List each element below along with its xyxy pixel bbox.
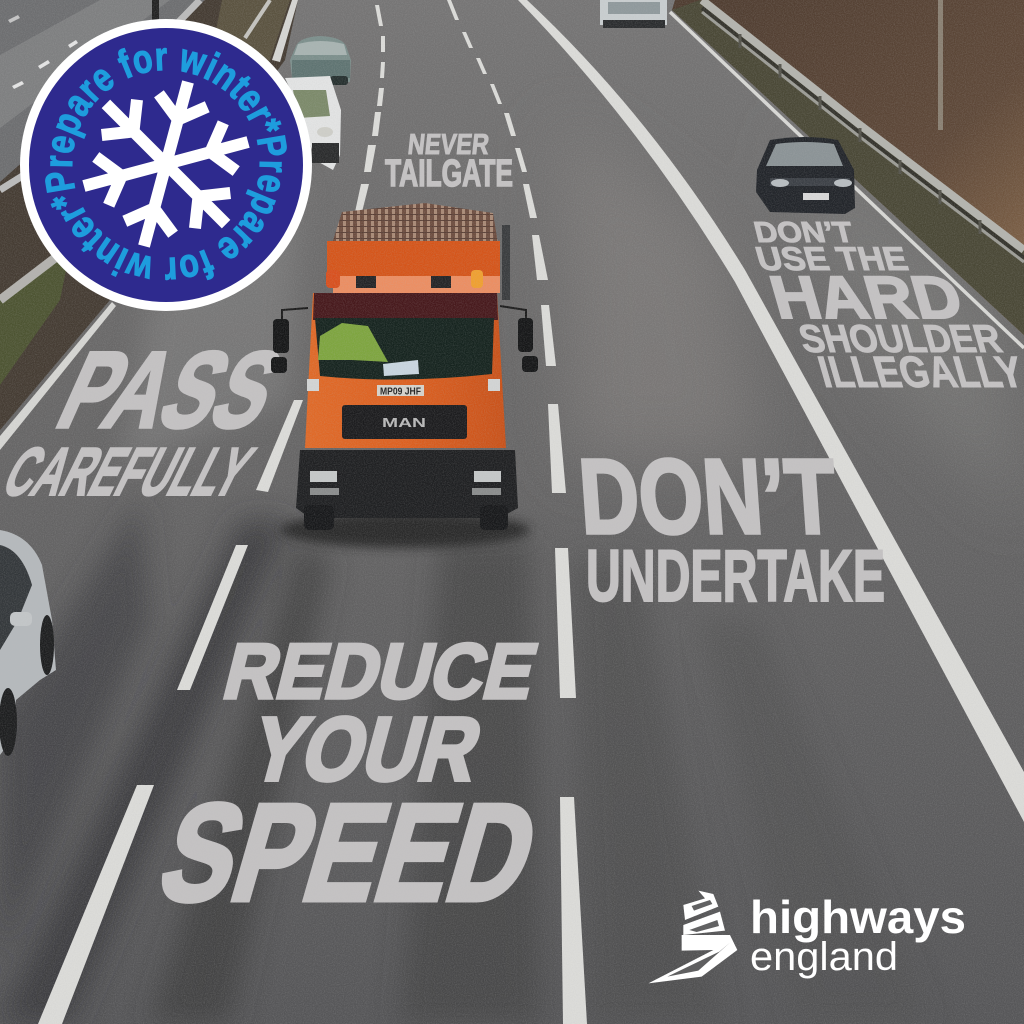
gritter bed grating — [330, 203, 499, 250]
badge ring text: e — [36, 131, 84, 157]
roadside crash barrier right — [702, 0, 1024, 262]
road text: never tailgate — [385, 129, 513, 195]
lane dashes left — [38, 5, 385, 1024]
silver car — [0, 530, 56, 756]
badge ring text: r — [238, 97, 284, 130]
badge white ring — [20, 19, 312, 311]
logo wordmark highways: highways — [750, 891, 966, 943]
badge ring text: n — [85, 229, 126, 277]
badge ring text: p — [42, 105, 91, 141]
badge ring text: r — [48, 198, 94, 231]
badge ring text: * — [41, 187, 88, 215]
central reservation with barriers and grass — [0, 0, 298, 430]
cab roof visor — [313, 293, 498, 320]
road text: reduce your speed — [146, 627, 554, 929]
road text: reduce your speed: REDUCE — [216, 627, 546, 715]
number plate: MP09 JHF — [380, 386, 421, 398]
verge top right — [672, 0, 1024, 335]
badge ring text: r — [67, 69, 109, 110]
green car — [290, 36, 351, 85]
badge ring text — [35, 33, 297, 295]
road text: don't use the hard shoulder illegally: USE THE — [752, 242, 912, 278]
badge ring text: e — [57, 209, 104, 250]
light bar panel — [333, 276, 500, 293]
badge ring text: i — [106, 239, 134, 284]
road text: never tailgate: TAILGATE — [385, 153, 513, 195]
left mirrors — [271, 308, 308, 373]
grille with brand: MAN — [382, 415, 426, 430]
white van — [285, 76, 341, 170]
badge ring text: w — [175, 34, 212, 85]
logo wordmark england: england — [750, 935, 898, 979]
badge ring text: P — [36, 168, 84, 196]
badge ring text: r — [251, 160, 297, 173]
badge ring text: n — [206, 51, 247, 99]
road text: don't undertake — [575, 438, 885, 617]
logo: highways england — [648, 891, 966, 983]
badge ring text: o — [128, 35, 157, 83]
road text: don't use the hard shoulder illegally — [751, 216, 1024, 397]
driver in hi-vis — [318, 323, 388, 362]
paper on dashboard — [383, 360, 419, 376]
badge ring text: e — [210, 227, 251, 274]
truck shadow — [280, 512, 530, 548]
badge ring text: * — [244, 114, 291, 141]
badge ring text: p — [241, 187, 290, 223]
bumper — [296, 450, 518, 518]
road text: don't undertake: DON’T — [575, 438, 840, 556]
windscreen — [315, 318, 494, 380]
black audi — [756, 137, 855, 214]
gritter truck — [271, 203, 538, 548]
grille with brand — [342, 405, 467, 439]
opposite carriageway top-left — [0, 0, 205, 182]
icon: snowflake — [61, 60, 271, 268]
roof beacons and lamps — [326, 270, 483, 288]
badge ring text: i — [198, 44, 226, 89]
logo icon — [648, 891, 737, 983]
road text: don't use the hard shoulder illegally: SHOULDER — [794, 318, 1007, 361]
badge ring text: r — [223, 218, 265, 259]
road text: don't use the hard shoulder illegally: DON’T — [751, 216, 857, 249]
badge ring text: t — [72, 222, 111, 262]
road text: reduce your speed: YOUR — [241, 699, 492, 800]
road edge line left — [0, 0, 298, 450]
badge navy disc — [29, 28, 303, 302]
lorry at top — [600, 0, 667, 28]
bumper lights — [310, 471, 501, 495]
headlamps — [307, 379, 500, 391]
badge ring text: e — [228, 78, 275, 119]
badge ring text: a — [53, 83, 101, 124]
badge ring text: e — [248, 171, 296, 197]
road text: pass carefully: PASS — [42, 330, 299, 450]
badge: prepare for winter — [20, 19, 312, 311]
badge ring text: r — [35, 155, 81, 168]
road text: reduce your speed: SPEED — [146, 776, 554, 929]
wheels — [304, 505, 508, 530]
badge ring text: r — [154, 33, 168, 79]
badge ring text: t — [221, 66, 260, 106]
badge ring text: f — [193, 241, 220, 287]
badge ring text: a — [231, 204, 279, 245]
badge ring text: r — [164, 249, 178, 295]
badge ring text: o — [175, 245, 204, 293]
gritter hopper — [327, 241, 500, 283]
lane dashes right — [447, 0, 587, 1024]
road text: don't use the hard shoulder illegally: HARD — [763, 264, 970, 331]
badge ring text: f — [112, 41, 139, 87]
badge ring text: e — [81, 54, 122, 101]
badge ring text: w — [120, 243, 157, 294]
hard shoulder edge lines — [518, 0, 1024, 822]
cab body — [305, 293, 506, 448]
badge ring text: P — [248, 132, 296, 160]
road text: pass carefully: CAREFULLY — [0, 434, 265, 510]
road text: never tailgate: NEVER — [406, 129, 491, 161]
right mirrors — [500, 306, 538, 372]
rear post — [502, 225, 510, 300]
road text: pass carefully — [0, 330, 299, 510]
